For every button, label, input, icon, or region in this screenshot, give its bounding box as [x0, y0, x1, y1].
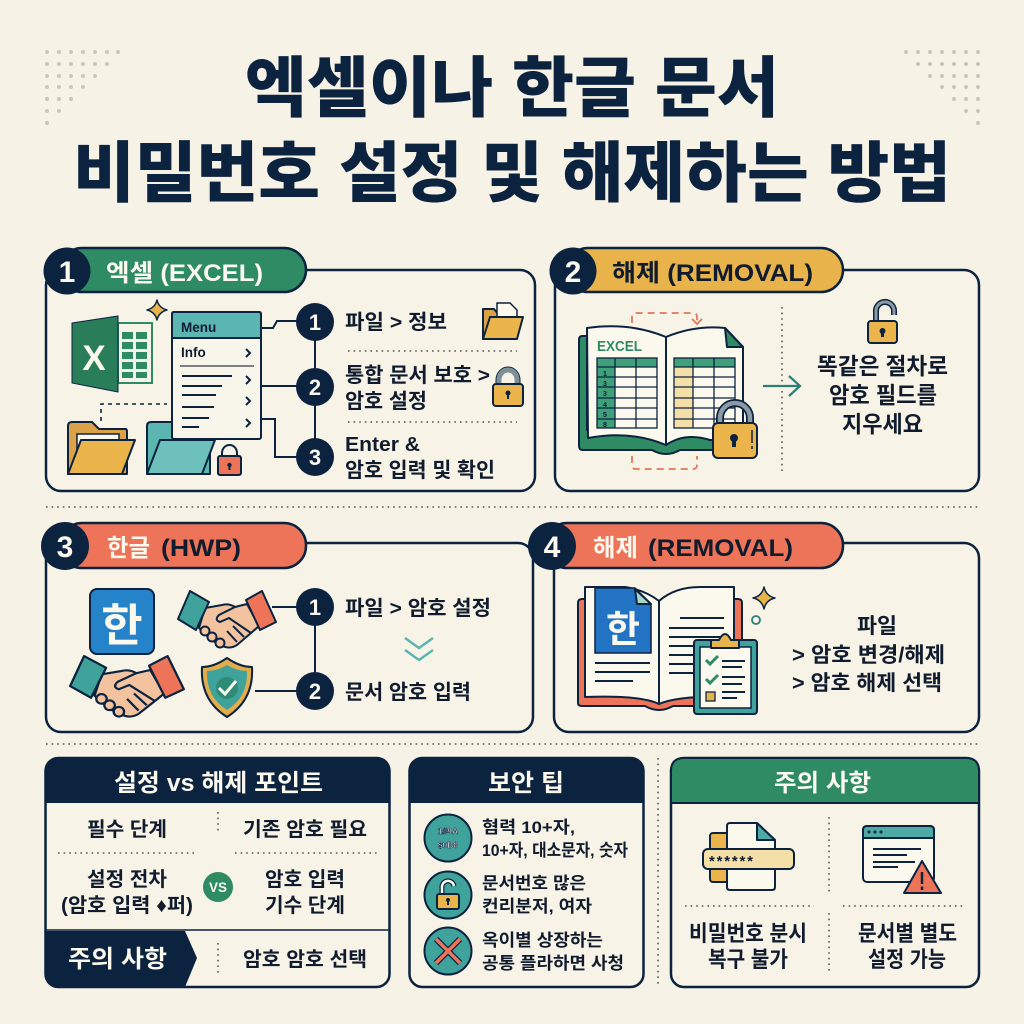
left cell 1: 필수 단계 — [87, 818, 167, 841]
menu window — [172, 312, 261, 439]
heading pill: removal: (REMOVAL) — [648, 535, 793, 562]
vs badge: VS — [209, 880, 227, 895]
tip 2 — [424, 872, 592, 918]
step 1: 파일 > 암호 설정 — [345, 597, 491, 620]
title — [73, 35, 951, 216]
icon: chevrons — [405, 638, 433, 660]
header bar: 설정 vs 해제 포인트 — [114, 770, 323, 797]
tip 2: 컨리분저, 여자 — [482, 897, 592, 916]
step 2: 2 — [309, 375, 321, 400]
tip 3: 공통 플라하면 사청 — [482, 954, 624, 973]
removal steps text — [792, 615, 945, 695]
tip 1: 혐력 10+자, — [482, 818, 575, 837]
header bar — [671, 758, 979, 803]
icon: red lock — [218, 445, 241, 475]
icon: sparkle — [753, 587, 775, 609]
caution text: 암호 암호 선택 — [243, 948, 367, 971]
step 1: 1 — [309, 310, 321, 335]
heading pill: Excel: 1 — [59, 256, 75, 289]
step 2: 암호 설정 — [345, 390, 427, 413]
left cell 2 — [61, 868, 193, 917]
heading pill: removal: 4 — [544, 531, 561, 564]
caution text right: 설정 가능 — [868, 947, 946, 972]
step 2: 문서 암호 입력 — [345, 681, 471, 704]
step 3: 3 — [309, 445, 321, 470]
icon: Hangul logo: 한 — [101, 600, 143, 651]
heading pill: removal — [528, 522, 843, 570]
icon: shield — [202, 658, 252, 717]
step 1 — [296, 303, 447, 341]
heading pill: HWP: 한글 — [107, 535, 150, 562]
step 2 — [296, 672, 471, 710]
heading pill: HWP — [41, 522, 306, 570]
icon: window with warning — [863, 826, 941, 893]
step 2: 2 — [309, 679, 321, 704]
header bar — [45, 758, 390, 803]
step 2: 통합 문서 보호 > — [345, 364, 490, 387]
caution text right — [858, 921, 957, 972]
heading pill: Excel — [44, 248, 306, 294]
icon: document with hidden password — [703, 823, 794, 890]
left cell 2: 설정 전차 — [87, 868, 167, 891]
vs badge — [203, 872, 233, 902]
step 1: 1 — [309, 595, 321, 620]
left table: 3 — [603, 391, 607, 398]
removal steps text: > 암호 해제 선택 — [792, 672, 942, 695]
removal steps text: > 암호 변경/해제 — [792, 644, 945, 667]
icon: open Hangul book: 한 — [606, 609, 640, 650]
panel 3: HWP — [41, 522, 533, 732]
caution text left: 복구 불가 — [708, 947, 788, 972]
icon: open Excel book: EXCEL — [597, 339, 642, 355]
left table: 3 — [603, 381, 607, 388]
step 1 — [296, 588, 491, 626]
icon: yellow lock — [493, 367, 523, 406]
step 3: Enter & — [345, 433, 420, 456]
heading pill: removal: 2 — [565, 256, 581, 289]
heading pill: HWP: 3 — [57, 531, 73, 564]
dashed link — [101, 404, 167, 421]
tip 3 — [424, 928, 624, 974]
icon: clipboard — [694, 634, 757, 714]
icon: sparkle — [147, 300, 167, 320]
header bar — [409, 758, 644, 803]
title: 엑셀이나 한글 문서 — [245, 35, 779, 131]
panel: setting vs removal — [45, 758, 390, 987]
right cell 1: 기존 암호 필요 — [243, 818, 367, 841]
heading pill: HWP: (HWP) — [161, 535, 241, 562]
right cell 2: 기수 단계 — [265, 894, 345, 917]
removal text: 암호 필드를 — [829, 382, 937, 408]
right cell 2 — [265, 868, 345, 917]
icon: handshake bottom — [70, 656, 184, 717]
menu window: Info — [181, 345, 206, 360]
panel: cautions — [671, 758, 979, 987]
left table: 8 — [603, 422, 607, 429]
header bar: 주의 사항 — [774, 770, 871, 797]
tip 3: 옥이별 상장하는 — [482, 931, 603, 950]
left table: 4 — [603, 402, 607, 409]
heading pill: removal — [550, 248, 843, 294]
left table — [597, 358, 657, 429]
left table: 1 — [603, 371, 607, 378]
arrow — [763, 376, 800, 396]
step 2 — [296, 364, 490, 413]
tip 2: 문서번호 많은 — [482, 874, 586, 893]
dashed arrows — [632, 313, 702, 469]
icon: Excel logo — [72, 316, 152, 392]
icon: yellow folder — [68, 422, 135, 474]
right cell 2: 암호 입력 — [265, 868, 345, 891]
tip 1: $0B8 — [438, 840, 458, 850]
connector lines — [261, 321, 315, 457]
removal text — [817, 353, 948, 437]
caution tag — [45, 931, 197, 987]
right table — [674, 358, 735, 428]
panel 2: Excel removal — [550, 248, 979, 491]
icon: folder with paper — [483, 303, 523, 339]
heading pill: Excel: 엑셀 (EXCEL) — [106, 260, 263, 287]
caution text left: 비밀번호 분시 — [689, 921, 807, 946]
heading pill: removal: 해제 (REMOVAL) — [612, 260, 813, 287]
icon: open Hangul book — [578, 587, 742, 710]
removal text: 지우세요 — [842, 411, 923, 437]
menu window: Menu — [181, 320, 216, 335]
connector lines — [255, 607, 315, 691]
icon: handshake top — [178, 591, 276, 648]
icon: small ring — [752, 616, 760, 624]
header bar: 보안 팁 — [488, 770, 564, 797]
step 3 — [296, 433, 495, 482]
left cell 2: (암호 입력 ♦퍼) — [61, 894, 193, 917]
decorative dots: top right — [904, 50, 980, 125]
heading pill: removal: 해제 — [593, 535, 638, 562]
caution text right: 문서별 별도 — [858, 921, 957, 946]
icon: Hangul logo — [90, 589, 154, 654]
panel 1: Excel — [44, 248, 535, 491]
icon: open Excel book — [579, 326, 743, 454]
caution tag: 주의 사항 — [68, 946, 167, 973]
caution text left — [689, 921, 807, 972]
panel 4: HWP removal — [528, 522, 979, 732]
icon: locked padlock — [713, 403, 757, 458]
decorative dots: top left — [45, 50, 120, 125]
removal text: 똑같은 절차로 — [817, 353, 948, 379]
step 1: 파일 > 정보 — [345, 311, 447, 334]
tip 1: 10+자, 대소문자, 숫자 — [482, 841, 628, 860]
panel: security tips — [409, 758, 644, 987]
tip 1: 1#9A — [438, 826, 458, 836]
icon: document with hidden password: ****** — [709, 853, 755, 870]
left table: 5 — [603, 412, 607, 419]
title: 비밀번호 설정 및 해제하는 방법 — [73, 120, 951, 216]
icon: teal folder — [147, 422, 215, 474]
step 3: 암호 입력 및 확인 — [345, 459, 495, 482]
removal steps text: 파일 — [857, 615, 897, 638]
icon: Excel logo: X — [82, 339, 106, 378]
icon: open padlock — [868, 302, 897, 343]
tip 1 — [424, 814, 628, 862]
